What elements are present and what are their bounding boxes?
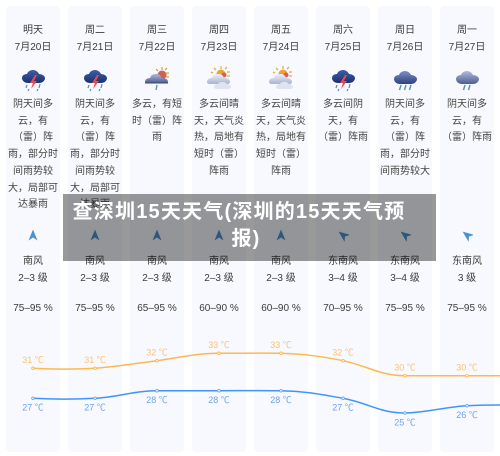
icon: wind arrow — [276, 230, 286, 240]
weather description: 多云间阴 — [323, 99, 363, 110]
icon: wind arrow — [90, 230, 100, 240]
humidity: 70–95 % — [323, 303, 363, 314]
panel: day 7 — [378, 6, 432, 452]
day label — [449, 24, 485, 53]
wind: 南风 — [85, 256, 105, 267]
weather description: 云，有 — [80, 116, 110, 127]
weather description: 云，有 — [390, 116, 420, 127]
weather description: （雷）阵 — [385, 132, 425, 143]
wind — [18, 255, 48, 284]
high temperature line: 32 ℃ — [332, 348, 354, 358]
wind: 南风 — [209, 256, 229, 267]
high temperature line: 30 ℃ — [394, 362, 416, 372]
wind — [80, 255, 110, 284]
humidity: 75–95 % — [385, 303, 425, 314]
day label: 周三 — [147, 25, 167, 36]
wind: 3–4 级 — [390, 273, 420, 284]
weather description: 云，有 — [18, 116, 48, 127]
weather description: 大，局部可 — [70, 183, 120, 194]
day label: 7月27日 — [449, 42, 485, 53]
weather description: 热，局地有 — [256, 132, 306, 143]
weather description: 达暴雨 — [80, 199, 110, 210]
humidity: 65–95 % — [137, 303, 177, 314]
icon: heavy rain cloud — [394, 71, 417, 90]
weather description: 间雨势较 — [75, 166, 115, 177]
weather description: 阴天间多 — [447, 99, 487, 110]
low temperature line: 26 ℃ — [456, 410, 478, 420]
wind: 东南风 — [452, 256, 482, 267]
weather description: 阴天间多 — [13, 99, 53, 110]
weather description: 阵雨 — [271, 166, 291, 177]
icon: sun behind clouds — [269, 66, 293, 89]
day label — [15, 24, 51, 53]
day label — [387, 24, 423, 53]
panel: day 8 — [440, 6, 494, 452]
wind: 南风 — [271, 256, 291, 267]
wind: 2–3 级 — [18, 273, 48, 284]
weather description: （雷）阵雨 — [318, 132, 368, 143]
wind — [142, 255, 172, 284]
icon: wind arrow — [400, 232, 411, 242]
weather description: 阴天间多 — [385, 99, 425, 110]
icon: wind arrow — [462, 232, 473, 242]
title: 报) — [231, 228, 261, 250]
weather description — [132, 98, 182, 143]
wind: 东南风 — [328, 256, 358, 267]
low temperature line: 28 ℃ — [208, 395, 230, 405]
weather description — [380, 98, 430, 177]
weather description: 天，天气炎 — [256, 116, 306, 127]
day label: 周二 — [85, 25, 105, 36]
panel: day 6 — [316, 6, 370, 452]
panel: day 4 — [192, 6, 246, 452]
icon: sun behind clouds — [207, 66, 231, 89]
weather description: 大，局部可 — [8, 183, 58, 194]
wind: 南风 — [147, 256, 167, 267]
panel: day 3 — [130, 6, 184, 452]
title: 查深圳15天天气(深圳的15天天气预 — [73, 201, 405, 223]
day label — [139, 24, 175, 53]
weather description: 热，局地有 — [194, 132, 244, 143]
day label: 明天 — [23, 25, 43, 36]
weather description: 达暴雨 — [18, 199, 48, 210]
icon: wind arrow — [28, 230, 38, 240]
weather description: 短时（雷） — [256, 149, 306, 160]
wind — [204, 255, 234, 284]
day label: 7月21日 — [77, 42, 113, 53]
day label — [325, 24, 361, 53]
weather description — [318, 98, 368, 143]
wind — [452, 255, 482, 284]
day label: 周日 — [395, 25, 415, 36]
wind: 2–3 级 — [80, 273, 110, 284]
wind: 南风 — [23, 256, 43, 267]
weather description — [442, 98, 492, 143]
high temperature line: 32 ℃ — [146, 348, 168, 358]
day label: 周五 — [271, 25, 291, 36]
weather description: 雨，部分时 — [8, 149, 58, 160]
wind — [266, 255, 296, 284]
low temperature line: 28 ℃ — [270, 395, 292, 405]
high temperature line — [22, 340, 500, 377]
day label — [263, 24, 299, 53]
weather description: 雨，部分时 — [380, 149, 430, 160]
wind: 2–3 级 — [204, 273, 234, 284]
weather description: 天，天气炎 — [194, 116, 244, 127]
high temperature line: 30 ℃ — [456, 362, 478, 372]
day label: 7月24日 — [263, 42, 299, 53]
day label: 周一 — [457, 25, 477, 36]
weather description: 雨 — [152, 132, 162, 143]
weather description: 阵雨 — [209, 166, 229, 177]
wind — [328, 255, 358, 284]
weather description: 多云间晴 — [261, 99, 301, 110]
low temperature line: 27 ℃ — [332, 402, 354, 412]
wind: 2–3 级 — [266, 273, 296, 284]
high temperature line: 33 ℃ — [208, 340, 230, 350]
weather description — [8, 98, 58, 210]
icon: thunderstorm — [332, 70, 355, 92]
day label: 7月22日 — [139, 42, 175, 53]
weather description: （雷）阵 — [13, 132, 53, 143]
icon: wind arrow — [214, 230, 224, 240]
panel: day 1 — [6, 6, 60, 452]
weather description: 阴天间多 — [75, 99, 115, 110]
low temperature line: 28 ℃ — [146, 395, 168, 405]
panel: day 5 — [254, 6, 308, 452]
weather description — [256, 98, 306, 177]
icon: rain cloud — [456, 71, 479, 90]
weather description: 短时（雷） — [194, 149, 244, 160]
weather description: 云，有 — [452, 116, 482, 127]
icon: wind arrow — [338, 232, 349, 242]
humidity: 60–90 % — [261, 303, 301, 314]
wind: 3 级 — [458, 273, 476, 284]
icon: cloud with sun and shower — [145, 67, 169, 90]
icon: wind arrow — [152, 230, 162, 240]
weather description: 多云，有短 — [132, 99, 182, 110]
weather description — [194, 98, 244, 177]
weather description: 间雨势较大 — [380, 166, 430, 177]
day label: 7月20日 — [15, 42, 51, 53]
day label: 周六 — [333, 25, 353, 36]
wind: 东南风 — [390, 256, 420, 267]
title overlay banner — [63, 194, 436, 261]
weather description: 时（雷）阵 — [132, 116, 182, 127]
humidity: 60–90 % — [199, 303, 239, 314]
high temperature line: 31 ℃ — [22, 355, 44, 365]
wind: 2–3 级 — [142, 273, 172, 284]
low temperature line — [22, 389, 500, 428]
high temperature line: 31 ℃ — [84, 355, 106, 365]
day label: 7月26日 — [387, 42, 423, 53]
day label — [77, 24, 113, 53]
weather description: （雷）阵 — [75, 132, 115, 143]
title — [69, 199, 409, 253]
wind — [390, 255, 420, 284]
day label: 7月23日 — [201, 42, 237, 53]
low temperature line: 25 ℃ — [394, 418, 416, 428]
low temperature line: 27 ℃ — [22, 402, 44, 412]
humidity: 75–95 % — [447, 303, 487, 314]
day label: 7月25日 — [325, 42, 361, 53]
weather description: 雨，部分时 — [70, 149, 120, 160]
humidity: 75–95 % — [13, 303, 53, 314]
icon: thunderstorm — [22, 70, 45, 92]
weather description — [70, 98, 120, 210]
weather description: 天，有 — [328, 116, 358, 127]
day label — [201, 24, 237, 53]
humidity: 75–95 % — [75, 303, 115, 314]
weather description: 多云间晴 — [199, 99, 239, 110]
day label: 周四 — [209, 25, 229, 36]
low temperature line: 27 ℃ — [84, 402, 106, 412]
icon: thunderstorm — [84, 70, 107, 92]
wind: 3–4 级 — [328, 273, 358, 284]
high temperature line: 33 ℃ — [270, 340, 292, 350]
weather description: （雷）阵雨 — [442, 132, 492, 143]
weather description: 间雨势较 — [13, 166, 53, 177]
panel: day 2 — [68, 6, 122, 452]
